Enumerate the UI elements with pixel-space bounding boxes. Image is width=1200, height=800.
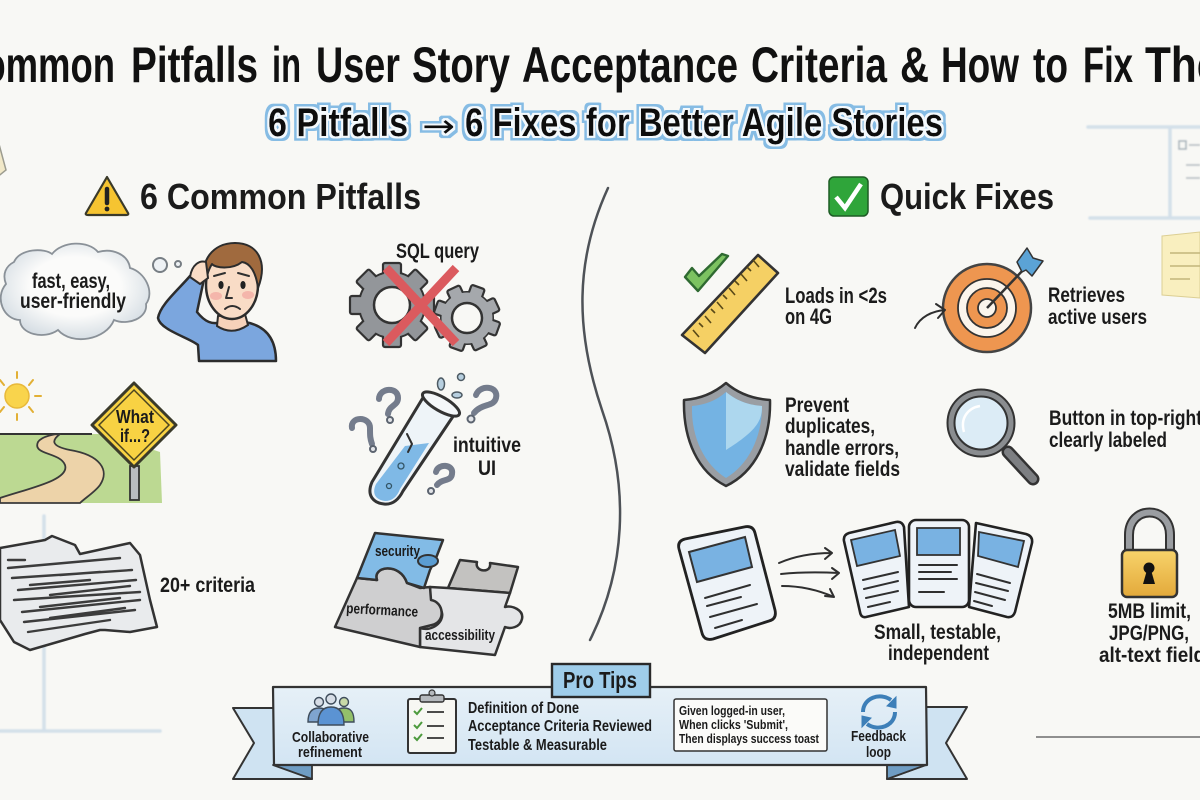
icon: worried person xyxy=(158,243,276,361)
icon: three small cards xyxy=(844,520,1032,617)
label: Small, testable, xyxy=(874,620,1001,644)
label: fast, easy, user-friendly xyxy=(20,270,126,313)
label: fast, easy, user-friendly: user-friendly xyxy=(20,290,126,313)
background sketch: left rule lines xyxy=(0,516,160,731)
title: Fix xyxy=(1083,37,1133,93)
Pro Tips tag: Pro Tips xyxy=(563,667,637,693)
icon: question dots and droplets xyxy=(370,374,474,494)
pitfall: implementation detail gears xyxy=(350,240,500,351)
puzzle piece: blue xyxy=(357,533,443,588)
icon: sun xyxy=(0,372,41,420)
label: duplicates, xyxy=(785,414,875,438)
arrow xyxy=(915,304,945,328)
icon: yellow What if sign xyxy=(92,383,176,500)
label: loop xyxy=(866,744,891,761)
heading: 6 Common Pitfalls: 6 Common Pitfalls xyxy=(140,176,421,217)
tip: Given When Then example: Given logged-in user, xyxy=(679,703,785,718)
puzzle knob xyxy=(418,555,438,567)
background sketch: top-left paper xyxy=(0,133,6,178)
icon: shield xyxy=(684,383,770,486)
heading: Quick Fixes xyxy=(829,176,1054,217)
heading: Quick Fixes: Quick Fixes xyxy=(880,176,1054,217)
icon: yellow What if sign: if...? xyxy=(120,426,150,446)
icon: thought cloud xyxy=(1,244,149,339)
title: in xyxy=(272,37,301,93)
title: Story xyxy=(412,37,510,93)
icon: gears xyxy=(350,263,500,351)
label xyxy=(1099,599,1200,667)
subtitle xyxy=(268,101,943,145)
subtitle: → xyxy=(422,107,455,145)
icon: warning triangle xyxy=(86,177,128,215)
label xyxy=(1048,283,1147,329)
label xyxy=(851,728,907,761)
title: to xyxy=(1033,37,1068,93)
icon: green check box xyxy=(829,177,868,216)
fix: target xyxy=(915,248,1147,352)
icon: red cross xyxy=(386,268,456,343)
title: Criteria xyxy=(751,37,888,93)
background sketch: sticky note xyxy=(1162,232,1200,298)
pitfall: implementation detail gears: SQL query xyxy=(396,240,479,263)
label: Definition of Done xyxy=(468,700,579,717)
background sketch: right rule lines xyxy=(1036,484,1200,737)
pitfall: puzzle of non-functional requirements xyxy=(335,533,522,655)
icon: grass field and winding path xyxy=(0,434,162,503)
tip: collaborative refinement xyxy=(292,694,369,761)
title: Acceptance xyxy=(522,37,738,93)
tip: Given When Then example xyxy=(674,699,827,751)
fix: magnifier xyxy=(951,393,1200,479)
icon: refresh arrows xyxy=(862,696,896,728)
icon: yellow What if sign: What xyxy=(116,407,154,427)
label xyxy=(1049,406,1200,452)
label: intuitive UI: UI xyxy=(478,457,496,480)
pitfall: long document: 20+ criteria xyxy=(160,574,255,597)
icon: test tube xyxy=(370,387,463,504)
label xyxy=(785,283,887,329)
pitfall: long document xyxy=(0,536,255,650)
label: clearly labeled xyxy=(1049,428,1167,452)
pitfall: road with What if sign xyxy=(0,372,176,503)
tip: Given When Then example: When clicks 'Submit', xyxy=(679,717,788,732)
subtitle: 6 Fixes for Better Agile Stories xyxy=(465,101,943,145)
title: How xyxy=(941,37,1019,93)
title xyxy=(0,37,1200,93)
ribbon body xyxy=(273,687,927,765)
icon: question marks xyxy=(352,388,496,485)
fix: split story into small cards xyxy=(679,520,1032,665)
label: Retrieves xyxy=(1048,283,1125,307)
label: Prevent xyxy=(785,393,849,417)
label: Feedback xyxy=(851,728,907,745)
label: Loads in <2s xyxy=(785,283,887,308)
title: Pitfalls xyxy=(131,37,258,93)
icon: large story card xyxy=(679,527,775,639)
fix: lock xyxy=(1099,512,1200,667)
label xyxy=(785,393,900,481)
label: active users xyxy=(1048,305,1147,329)
label: refinement xyxy=(298,744,362,761)
icon: crumpled scroll xyxy=(0,536,157,650)
label: intuitive UI: intuitive xyxy=(453,434,521,457)
puzzle piece: lower-right light xyxy=(420,587,522,655)
icon: green check xyxy=(685,254,728,291)
title: User xyxy=(316,37,400,93)
label: Collaborative xyxy=(292,729,369,746)
label: handle errors, xyxy=(785,436,899,460)
fix: shield xyxy=(684,383,900,486)
label: Testable & Measurable xyxy=(468,737,607,754)
tip: feedback loop xyxy=(851,696,907,761)
tip: definition of done checklist xyxy=(408,690,652,754)
icon: ruler xyxy=(682,255,778,353)
fix: measurable ruler xyxy=(682,254,887,353)
pitfall: puzzle of non-functional requirements: security xyxy=(375,544,420,560)
title: & xyxy=(900,37,929,93)
icon: magnifying glass xyxy=(951,393,1033,479)
label: fast, easy, user-friendly: fast, easy, xyxy=(32,270,110,293)
icon: clipboard xyxy=(408,690,456,753)
panel: Pro Tips banner xyxy=(233,664,967,779)
arrows: split xyxy=(779,548,839,597)
label: Acceptance Criteria Reviewed xyxy=(468,718,652,735)
pitfall: vague cloud and confused person xyxy=(1,243,276,361)
icon: dart xyxy=(987,248,1043,308)
icon: padlock xyxy=(1122,512,1177,597)
icon: bullseye xyxy=(943,264,1031,352)
label xyxy=(292,729,369,761)
pitfall: puzzle of non-functional requirements: performance xyxy=(346,601,419,621)
tip: Given When Then example: Then displays success toast xyxy=(679,731,820,746)
label xyxy=(874,620,1001,665)
background sketch: top-right wireframe xyxy=(1088,127,1200,218)
icon: people xyxy=(308,694,354,725)
label: validate fields xyxy=(785,457,900,481)
subtitle: 6 Pitfalls xyxy=(268,101,408,145)
label: on 4G xyxy=(785,304,832,329)
center divider curve xyxy=(582,188,620,640)
pitfall: broken test tube xyxy=(352,374,521,504)
puzzle piece: lower-left grey xyxy=(335,568,442,647)
label: intuitive UI xyxy=(453,434,521,480)
label: independent xyxy=(888,641,989,665)
Pro Tips tag xyxy=(552,664,650,697)
label xyxy=(468,700,652,754)
puzzle piece: top-right grey xyxy=(448,560,518,593)
ribbon tails xyxy=(233,707,967,779)
pitfall: puzzle of non-functional requirements: accessibility xyxy=(425,628,495,644)
icon: thought bubbles xyxy=(153,258,181,272)
